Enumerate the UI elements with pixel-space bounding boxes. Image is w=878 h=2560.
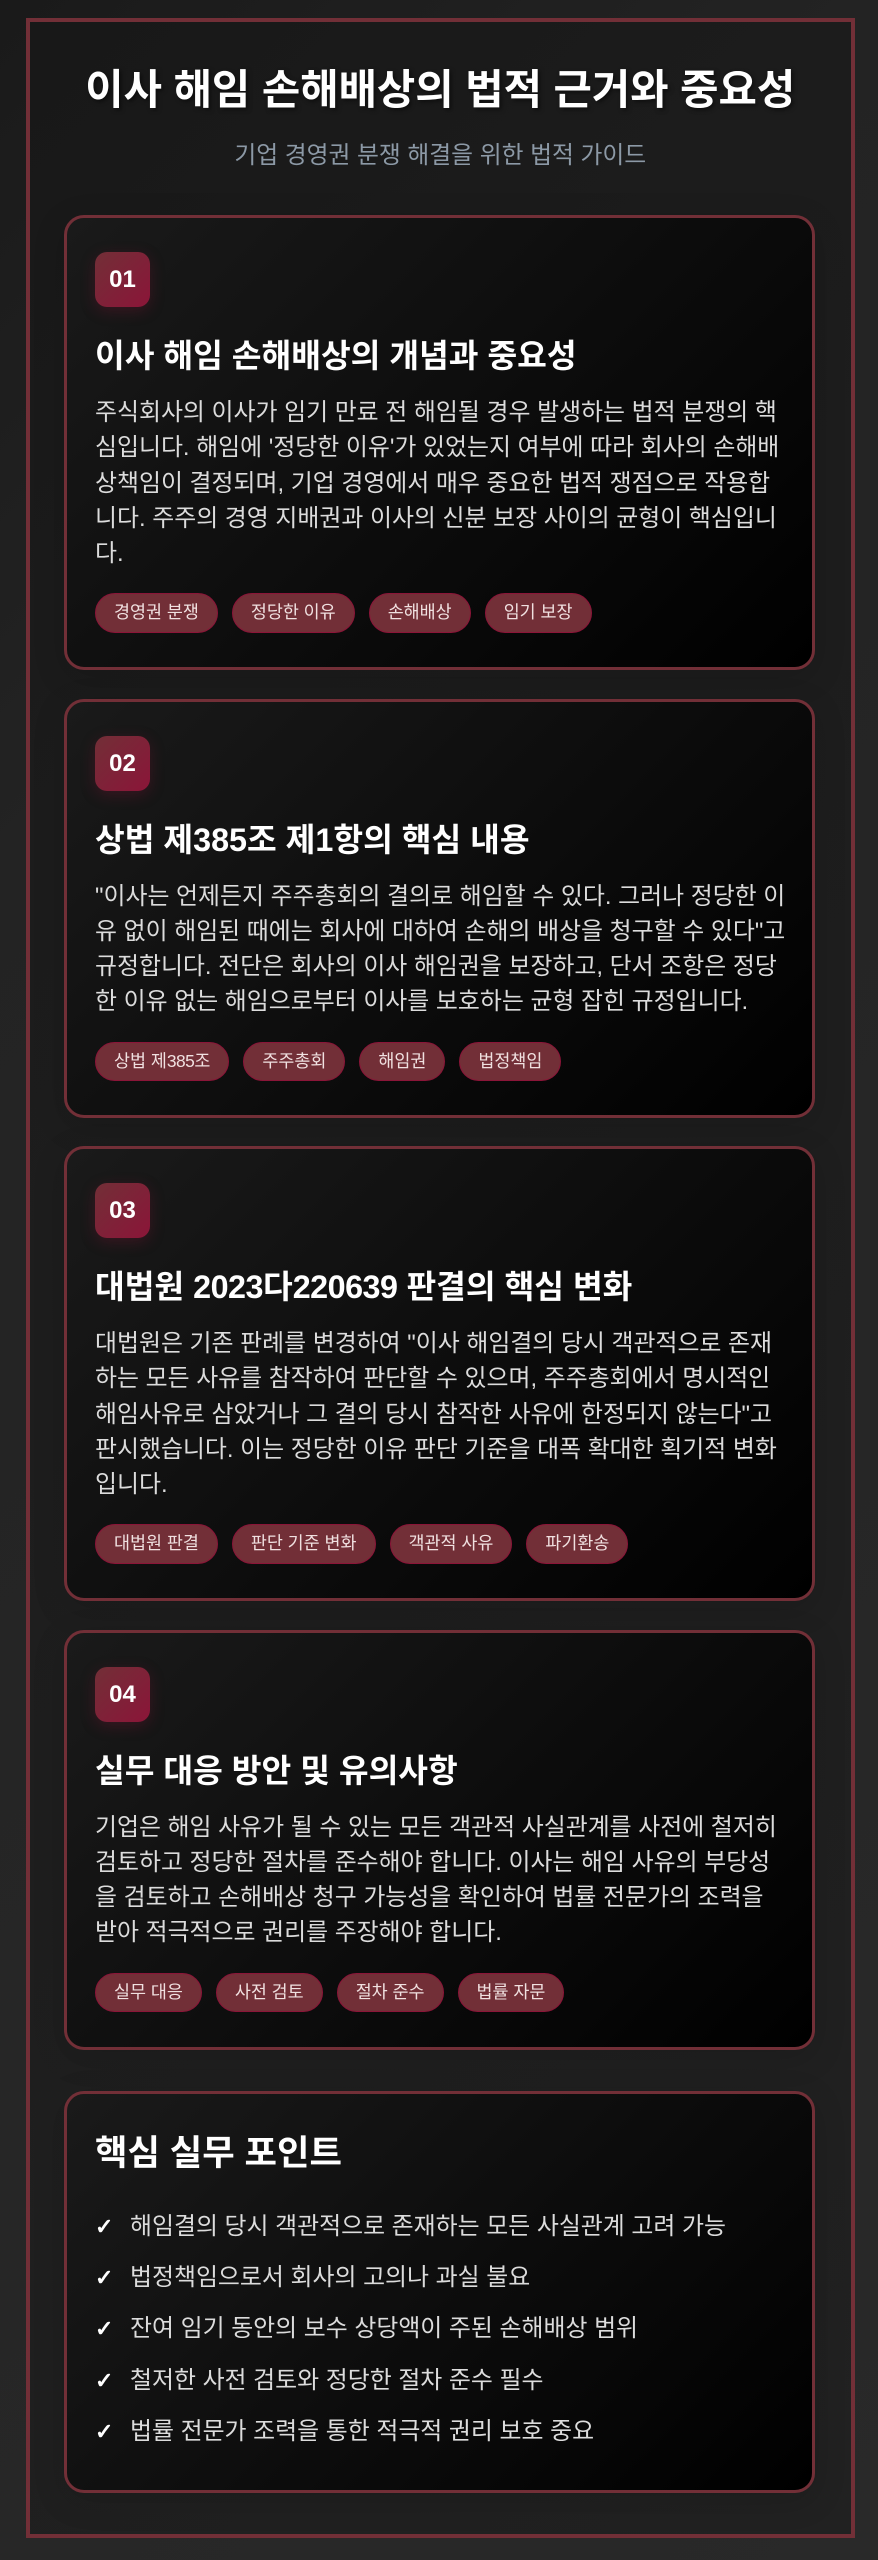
tags 02: 법정책임 xyxy=(478,1051,542,1071)
panel: key practical points xyxy=(64,2091,815,2493)
subtitle: 기업 경영권 분쟁 해결을 위한 법적 가이드 xyxy=(234,142,646,169)
panel: section 03 xyxy=(64,1146,815,1601)
tags 04: 사전 검토 xyxy=(235,1982,304,2002)
text block 04: 받아 적극적으로 권리를 주장해야 합니다. xyxy=(95,1919,502,1946)
tags 01: 임기 보장 xyxy=(504,602,573,622)
checklist: 철저한 사전 검토와 정당한 절차 준수 필수 xyxy=(130,2367,543,2394)
badge 01 xyxy=(95,252,150,307)
heading 03: 대법원 2023다220639 판결의 핵심 변화 xyxy=(95,1269,632,1305)
tags 04: 절차 준수 xyxy=(356,1982,425,2002)
text block 03: 대법원은 기존 판례를 변경하여 "이사 해임결의 당시 객관적으로 존재 xyxy=(95,1330,772,1357)
tags 03 xyxy=(95,1524,628,1564)
tags 03: 대법원 판결 xyxy=(114,1533,199,1553)
text block 02: 유 없이 해임된 때에는 회사에 대하여 손해의 배상을 청구할 수 있다"고 xyxy=(95,918,785,945)
text block 02 xyxy=(95,882,785,1015)
tags 02 xyxy=(95,1042,561,1081)
title: 이사 해임 손해배상의 법적 근거와 중요성 xyxy=(85,66,795,113)
badge 04: 04 xyxy=(109,1680,136,1708)
text block 03 xyxy=(95,1330,777,1498)
checklist: ✓ xyxy=(95,2214,113,2239)
tags 04: 실무 대응 xyxy=(114,1982,183,2002)
checklist: ✓ xyxy=(95,2419,113,2444)
tags 03: 판단 기준 변화 xyxy=(251,1533,357,1553)
text block 01: 주식회사의 이사가 임기 만료 전 해임될 경우 발생하는 법적 분쟁의 핵 xyxy=(95,399,777,426)
heading 04: 실무 대응 방안 및 유의사항 xyxy=(95,1752,458,1788)
text block 04: 을 검토하고 손해배상 청구 가능성을 확인하여 법률 전문가의 조력을 xyxy=(95,1884,764,1911)
tags 01: 손해배상 xyxy=(388,602,452,622)
tags 04: 법률 자문 xyxy=(477,1982,545,2002)
text block 02: 규정합니다. 전단은 회사의 이사 해임권을 보장하고, 단서 조항은 정당 xyxy=(95,953,777,980)
checklist: ✓ xyxy=(95,2368,113,2393)
text block 01: 니다. 주주의 경영 지배권과 이사의 신분 보장 사이의 균형이 핵심입니 xyxy=(95,505,777,532)
badge 03 xyxy=(95,1183,150,1238)
checklist: ✓ xyxy=(95,2265,113,2290)
tags 02: 주주총회 xyxy=(262,1051,326,1071)
text block 04 xyxy=(95,1814,777,1946)
tags 01: 경영권 분쟁 xyxy=(114,602,199,622)
panel: section 01 xyxy=(64,215,815,670)
text block 04: 기업은 해임 사유가 될 수 있는 모든 객관적 사실관계를 사전에 철저히 xyxy=(95,1814,777,1840)
tags 02: 상법 제385조 xyxy=(114,1051,210,1071)
text block 04: 검토하고 정당한 절차를 준수해야 합니다. 이사는 해임 사유의 부당성 xyxy=(95,1849,770,1876)
text block 01: 심입니다. 해임에 '정당한 이유'가 있었는지 여부에 따라 회사의 손해배 xyxy=(95,434,779,461)
checklist: 법률 전문가 조력을 통한 적극적 권리 보호 중요 xyxy=(130,2418,594,2445)
checklist: 잔여 임기 동안의 보수 상당액이 주된 손해배상 범위 xyxy=(130,2315,638,2342)
heading 01: 이사 해임 손해배상의 개념과 중요성 xyxy=(95,338,577,374)
badge 01: 01 xyxy=(109,266,136,293)
checklist: 해임결의 당시 객관적으로 존재하는 모든 사실관계 고려 가능 xyxy=(130,2213,726,2240)
text block 03: 입니다. xyxy=(95,1471,168,1498)
text block 01 xyxy=(95,399,779,567)
text block 01: 다. xyxy=(95,540,124,567)
panel: section 02 xyxy=(64,698,815,1118)
panel: section 04 xyxy=(64,1630,815,2050)
tags 04 xyxy=(95,1973,564,2012)
text block 03: 판시했습니다. 이는 정당한 이유 판단 기준을 대폭 확대한 획기적 변화 xyxy=(95,1436,777,1463)
checklist: 법정책임으로서 회사의 고의나 과실 불요 xyxy=(130,2264,530,2291)
badge 03: 03 xyxy=(109,1197,136,1224)
badge 02: 02 xyxy=(109,750,136,776)
tags 01: 정당한 이유 xyxy=(251,602,336,622)
badge 02 xyxy=(95,736,150,790)
tags 03: 객관적 사유 xyxy=(409,1533,493,1553)
tags 01 xyxy=(95,593,592,633)
text block 03: 하는 모든 사유를 참작하여 판단할 수 있으며, 주주총회에서 명시적인 xyxy=(95,1365,770,1392)
tags 03: 파기환송 xyxy=(545,1533,609,1553)
text block 02: "이사는 언제든지 주주총회의 결의로 해임할 수 있다. 그러나 정당한 이 xyxy=(95,882,785,910)
heading 02: 상법 제385조 제1항의 핵심 내용 xyxy=(95,822,530,858)
heading: key points: 핵심 실무 포인트 xyxy=(95,2134,342,2173)
text block 02: 한 이유 없는 해임으로부터 이사를 보호하는 균형 잡힌 규정입니다. xyxy=(95,988,748,1015)
text block 01: 상책임이 결정되며, 기업 경영에서 매우 중요한 법적 쟁점으로 작용합 xyxy=(95,470,770,497)
text block 03: 해임사유로 삼았거나 그 결의 당시 참작한 사유에 한정되지 않는다"고 xyxy=(95,1401,772,1428)
checklist: ✓ xyxy=(95,2316,113,2341)
checklist xyxy=(95,2213,726,2445)
tags 02: 해임권 xyxy=(378,1051,426,1071)
badge 04 xyxy=(95,1666,150,1722)
